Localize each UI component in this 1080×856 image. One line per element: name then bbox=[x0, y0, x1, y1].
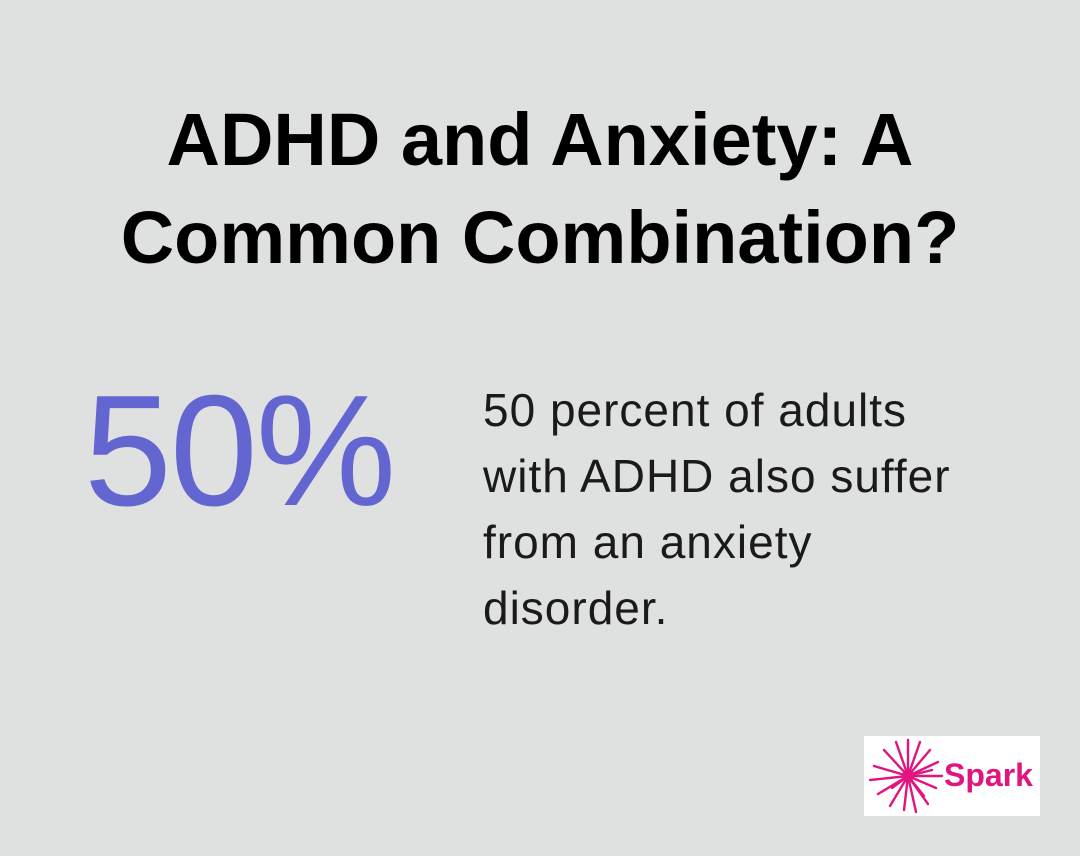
title: Common Combination? bbox=[121, 196, 959, 279]
logo text: Spark bbox=[944, 757, 1033, 793]
description text: with ADHD also suffer bbox=[483, 450, 951, 502]
logo: Spark bbox=[864, 736, 1040, 816]
description text: from an anxiety bbox=[483, 516, 812, 568]
description text: disorder. bbox=[483, 582, 668, 634]
title bbox=[121, 98, 959, 279]
description text bbox=[483, 384, 951, 634]
description text: 50 percent of adults bbox=[483, 384, 907, 436]
icon: starburst bbox=[870, 740, 942, 812]
title: ADHD and Anxiety: A bbox=[167, 98, 913, 181]
big statistic: 50% bbox=[84, 363, 394, 539]
